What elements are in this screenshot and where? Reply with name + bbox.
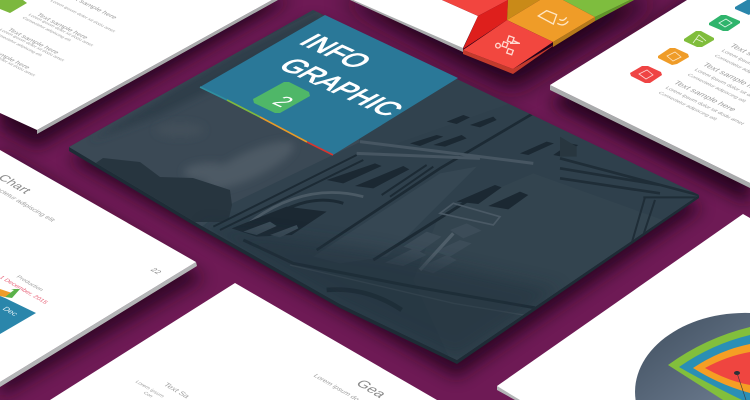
window row — [327, 163, 382, 183]
icon: green tile — [684, 31, 714, 47]
tile: red — [463, 20, 553, 69]
text block: top-right list: Consectetur adipiscing elit — [656, 91, 719, 122]
label: production: Production — [14, 275, 44, 292]
title panel: teal square — [200, 15, 458, 155]
panel: top-centre slide with stepped tiles — [350, 0, 634, 74]
heading: Gear: Gea — [352, 378, 390, 400]
icon: bell on orange tile — [538, 11, 568, 25]
sky — [69, 10, 360, 228]
text block: gear item — [133, 380, 193, 400]
dark rooftops top-left — [114, 14, 321, 130]
clouds — [186, 142, 293, 188]
icon: blue tile — [735, 0, 750, 15]
orange fold — [507, 0, 540, 20]
panel: mid-left chart slide — [0, 150, 197, 387]
text block: top-left list: Consectetur adipiscing elit — [21, 16, 73, 42]
slide edge — [69, 147, 699, 364]
page number: 22 — [148, 266, 164, 275]
panel: bottom-centre slide — [50, 283, 437, 400]
panel: bottom-right radar slide — [497, 214, 750, 400]
lower shading — [245, 232, 542, 354]
text block: top-left list: Lorem ipsum dolor sit dodu amet — [0, 28, 66, 62]
icon: green tile — [0, 0, 27, 13]
badge: number 2: 2 — [266, 93, 300, 110]
icon: red tile — [630, 66, 662, 83]
text block: top-right list: Lorem ipsum dolor sit dodu amet — [663, 86, 746, 126]
chart: funnel bar: Dec — [0, 305, 20, 317]
tile: orange — [507, 0, 595, 42]
text block: top-right list — [656, 42, 750, 126]
text block: top-right list: Consectetur adipiscing elit — [685, 73, 748, 104]
panel: top-right slide — [550, 0, 750, 188]
text block: top-left list: Text sample here — [5, 28, 60, 55]
chart: radar — [635, 313, 750, 400]
tile edges — [463, 0, 634, 74]
text block: top-left list: Lorem ipsum dolor sit dodu amet — [27, 13, 95, 47]
tile: green — [563, 0, 630, 17]
title text: INFO — [292, 30, 380, 72]
icon: orange tile — [658, 48, 689, 65]
building details — [210, 100, 700, 367]
text block: top-left list — [0, 0, 118, 77]
right-hand facade — [560, 137, 698, 243]
chart: funnel bar — [0, 289, 36, 334]
colour strip — [200, 87, 333, 155]
text block: top-left list: Text sample here — [34, 13, 89, 40]
badge: number 2 — [253, 82, 310, 113]
icon: connector on red tile — [496, 36, 520, 55]
text block: top-left list: Lorem ipsum dolor sit dodu amet — [49, 0, 117, 33]
building silhouette lower-left — [93, 158, 232, 222]
text block: gear item: Con — [141, 391, 155, 399]
title text: GRAPHIC — [271, 54, 411, 120]
text block: gear item: Text Sa — [161, 381, 193, 400]
text block: top-right list: Text sample here — [671, 79, 740, 113]
red fold — [442, 0, 508, 16]
icon: teal-green tile — [709, 15, 740, 31]
panel: top-left slide — [0, 0, 278, 134]
text block: gear item: Lorem ipsum — [133, 380, 166, 399]
